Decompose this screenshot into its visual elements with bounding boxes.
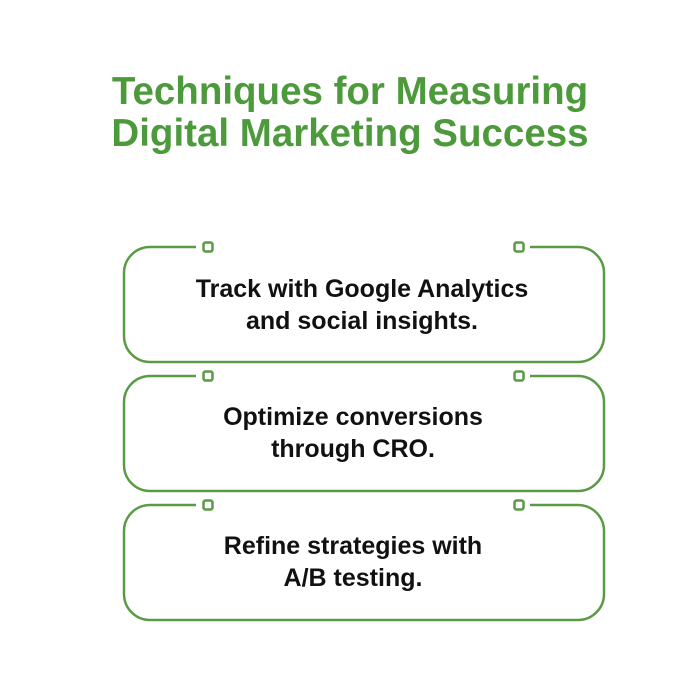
text 2: through CRO. xyxy=(271,435,435,463)
box 1 xyxy=(124,242,604,362)
box 3 xyxy=(124,500,604,620)
text 2 xyxy=(223,403,483,463)
title: Digital Marketing Success xyxy=(111,112,589,155)
box 2 xyxy=(124,372,604,491)
text 3 xyxy=(224,532,482,592)
text 3: Refine strategies with xyxy=(224,532,482,560)
text 2: Optimize conversions xyxy=(223,403,483,431)
title: Techniques for Measuring xyxy=(112,70,588,113)
text 1 xyxy=(196,275,528,335)
title xyxy=(111,70,589,155)
text 1: and social insights. xyxy=(246,307,478,335)
text 3: A/B testing. xyxy=(284,564,422,592)
text 1: Track with Google Analytics xyxy=(196,275,528,303)
